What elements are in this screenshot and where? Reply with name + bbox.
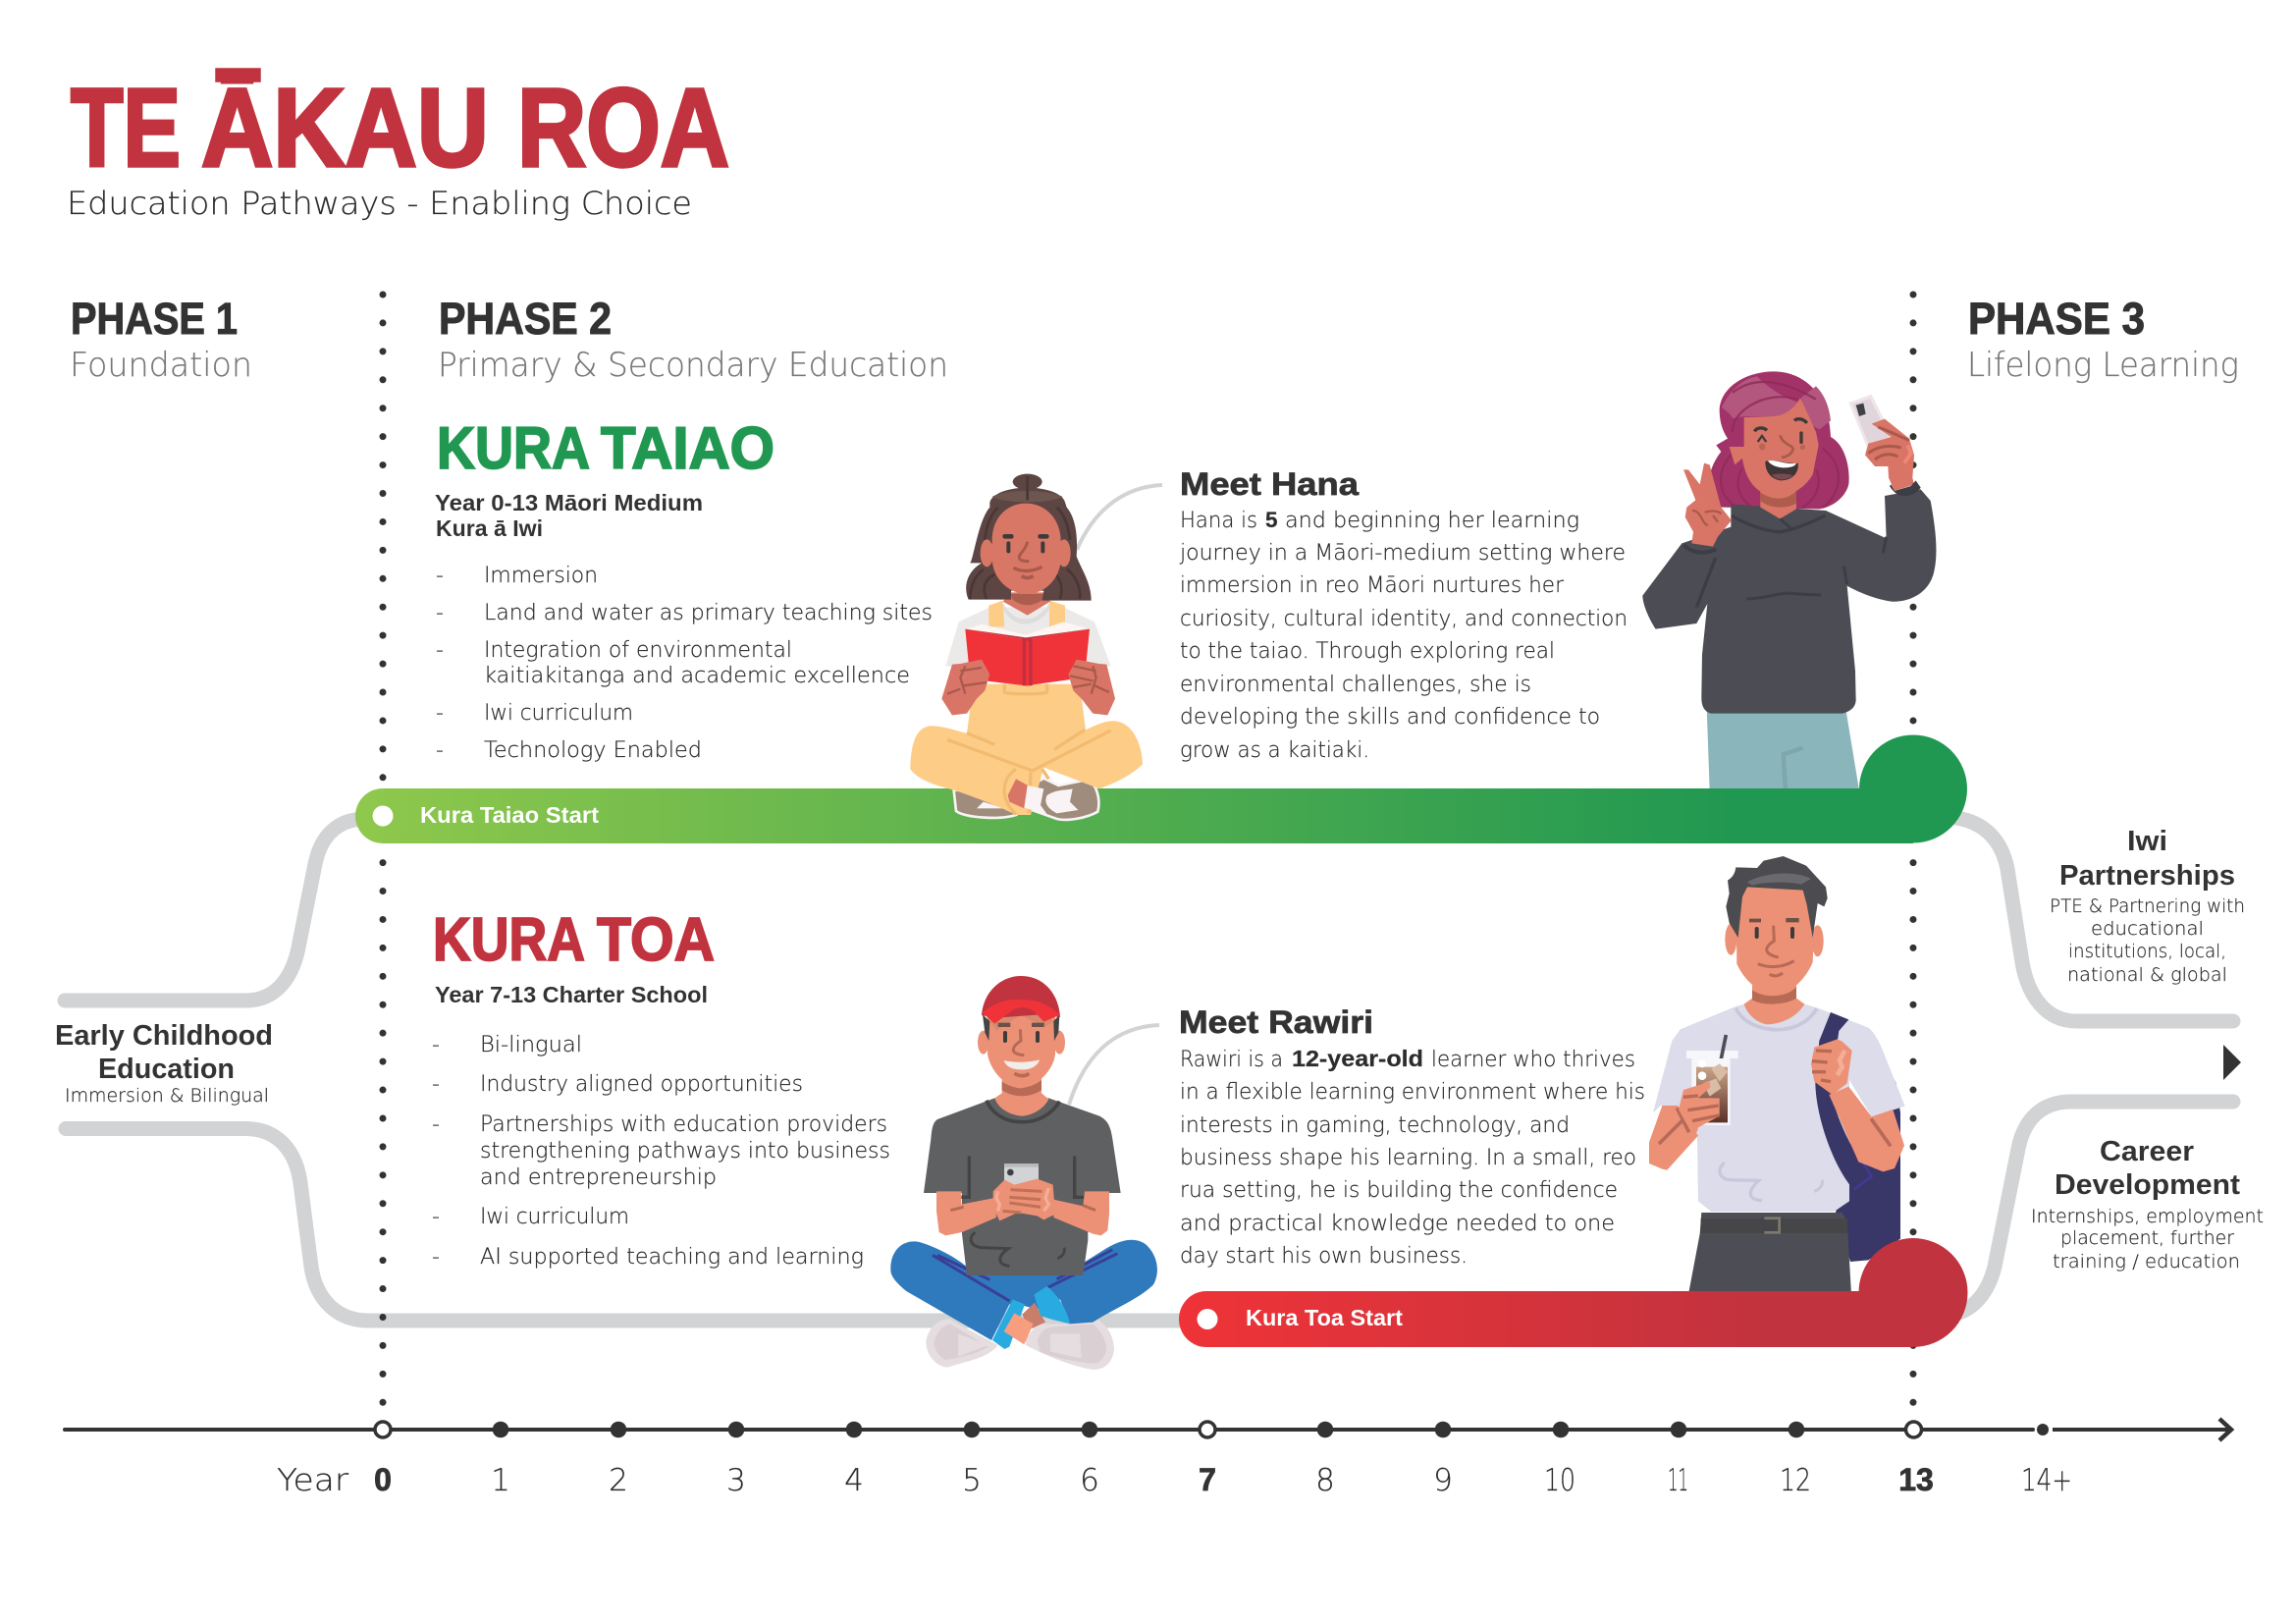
feature list: Land and water as primary teaching sites xyxy=(484,601,933,625)
feature list: Integration of environmental xyxy=(484,638,792,663)
iwi partnerships label: PTE & Partnering with xyxy=(2050,895,2245,917)
feature list: Iwi curriculum xyxy=(480,1205,629,1229)
phase 2 heading: Primary & Secondary Education xyxy=(438,346,948,385)
feature list: and entrepreneurship xyxy=(480,1165,717,1190)
body text: interests in gaming, technology, and xyxy=(1180,1112,1570,1138)
body text: learner who thrives xyxy=(1431,1047,1635,1072)
early childhood label: Early Childhood xyxy=(55,1020,273,1052)
panel: kura toa text xyxy=(432,906,890,1270)
illustration: child rawiri xyxy=(890,976,1157,1370)
early childhood label xyxy=(55,1020,273,1107)
body text: Hana is xyxy=(1180,508,1257,533)
feature list: AI supported teaching and learning xyxy=(480,1245,864,1270)
heading: kura taiao xyxy=(437,415,774,481)
pathway lines: grey connectors xyxy=(65,817,2233,1321)
feature list: - xyxy=(436,601,444,625)
body text: immersion in reo Māori nurtures her xyxy=(1180,572,1565,598)
feature list xyxy=(432,1033,890,1270)
body text: curiosity, cultural identity, and connection xyxy=(1180,606,1628,631)
iwi partnerships label: institutions, local, xyxy=(2068,941,2226,962)
phase 1 heading xyxy=(70,294,252,385)
iwi partnerships label: Iwi xyxy=(2127,826,2167,857)
connector curve xyxy=(1077,485,1162,550)
feature list: kaitiakitanga and academic excellence xyxy=(484,664,910,688)
subheading: Year 7-13 Charter School xyxy=(435,982,708,1007)
feature list: - xyxy=(436,701,444,726)
year labels: 9 xyxy=(1433,1463,1453,1498)
feature list: - xyxy=(432,1033,440,1057)
title: ROA xyxy=(517,66,729,189)
year labels: 4 xyxy=(844,1463,864,1498)
feature list: Industry aligned opportunities xyxy=(480,1072,803,1097)
illustration: teen rawiri xyxy=(1649,856,1905,1294)
year labels: 12 xyxy=(1780,1463,1811,1498)
body text: environmental challenges, she is xyxy=(1180,672,1531,697)
feature list: - xyxy=(436,564,444,588)
career development label: Career xyxy=(2100,1136,2194,1167)
feature list: Partnerships with education providers xyxy=(480,1112,887,1137)
year labels: 1 xyxy=(491,1463,510,1498)
heading: kura toa: KURA xyxy=(433,906,585,974)
heading: kura taiao: KURA xyxy=(437,415,590,481)
title: ĀKAU xyxy=(201,66,489,189)
phase 1 heading: Foundation xyxy=(70,346,252,385)
body text: business shape his learning. In a small, reo xyxy=(1180,1145,1636,1170)
feature list: Iwi curriculum xyxy=(484,701,633,726)
body text xyxy=(1179,508,1628,763)
career development label: Internships, employment xyxy=(2031,1206,2264,1227)
year labels: 3 xyxy=(726,1463,746,1498)
timeline axis: 13 xyxy=(1898,1462,1934,1497)
iwi partnerships label xyxy=(2050,826,2245,986)
callout: meet rawiri xyxy=(1069,1004,1645,1269)
feature list: Bi-lingual xyxy=(480,1033,582,1057)
career development label: training / education xyxy=(2053,1251,2240,1272)
phase 1 heading: PHASE 1 xyxy=(71,294,238,344)
early childhood label: Immersion & Bilingual xyxy=(65,1085,269,1107)
body text: to the taiao. Through exploring real xyxy=(1180,638,1555,664)
year labels: 6 xyxy=(1080,1463,1099,1498)
callout: meet hana: Meet Hana xyxy=(1180,466,1359,502)
body text: rua setting, he is building the confidence xyxy=(1180,1177,1618,1203)
year labels: 10 xyxy=(1544,1463,1575,1498)
timeline axis: 0 xyxy=(374,1462,392,1497)
iwi partnerships label: educational xyxy=(2091,918,2204,940)
illustration: child hana xyxy=(910,474,1143,820)
feature list: - xyxy=(436,638,444,663)
panel: kura taiao text xyxy=(435,415,933,763)
body text: developing the skills and confidence to xyxy=(1180,704,1600,730)
year labels: 2 xyxy=(609,1463,628,1498)
career development label: placement, further xyxy=(2060,1227,2234,1249)
year labels: 8 xyxy=(1315,1463,1335,1498)
phase 3 heading: Lifelong Learning xyxy=(1967,346,2239,385)
early childhood label: Education xyxy=(98,1054,235,1085)
subheading xyxy=(435,490,703,541)
red kura toa start bar xyxy=(1179,1238,1967,1347)
body text: grow as a kaitiaki. xyxy=(1180,737,1369,763)
dotted phase divider: year 13 xyxy=(1910,295,1916,1404)
green kura taiao start bar xyxy=(355,734,1967,843)
feature list: Technology Enabled xyxy=(484,738,702,763)
body text: journey in a Māori-medium setting where xyxy=(1179,540,1626,566)
year labels xyxy=(277,1463,2072,1498)
feature list: Immersion xyxy=(484,564,598,588)
body text: Rawiri is a xyxy=(1180,1047,1283,1072)
callout: meet hana xyxy=(1077,466,1628,763)
year labels: 5 xyxy=(962,1463,982,1498)
feature list: - xyxy=(436,738,444,763)
timeline axis: 7 xyxy=(1199,1462,1216,1497)
year labels: Year xyxy=(277,1463,348,1498)
red kura toa start bar: Kura Toa Start xyxy=(1246,1305,1403,1330)
feature list: - xyxy=(432,1072,440,1097)
subheading: Year 0-13 Māori Medium xyxy=(435,490,703,515)
feature list: - xyxy=(432,1205,440,1229)
year markers xyxy=(493,1422,2049,1437)
heading: kura toa: TOA xyxy=(597,906,715,974)
connector curve xyxy=(1069,1025,1159,1105)
timeline axis xyxy=(65,1419,2231,1498)
feature list: - xyxy=(432,1112,440,1137)
feature list: - xyxy=(432,1245,440,1270)
career development label: Development xyxy=(2055,1169,2240,1201)
heading: kura taiao: TAIAO xyxy=(601,415,774,481)
dotted phase divider: year 0 xyxy=(379,295,387,1404)
bag strap xyxy=(1815,1012,1872,1190)
phase 2 heading: PHASE 2 xyxy=(439,294,612,344)
body text: in a flexible learning environment where his xyxy=(1180,1079,1645,1105)
callout: meet rawiri: Meet Rawiri xyxy=(1179,1004,1373,1040)
phase 2 heading xyxy=(438,294,948,385)
career development label xyxy=(2031,1136,2264,1272)
phase 3 heading xyxy=(1967,294,2239,385)
title: TE xyxy=(71,66,181,189)
iwi partnerships label: Partnerships xyxy=(2059,860,2235,892)
body text: day start his own business. xyxy=(1180,1243,1468,1269)
feature list: strengthening pathways into business xyxy=(480,1139,890,1164)
subtitle: Education Pathways - Enabling Choice xyxy=(67,185,692,222)
title xyxy=(71,66,729,189)
feature list xyxy=(436,564,933,763)
green kura taiao start bar: Kura Taiao Start xyxy=(420,802,599,828)
body text: and practical knowledge needed to one xyxy=(1180,1211,1615,1236)
subheading: Kura ā Iwi xyxy=(436,515,543,541)
icon: arrow triangle xyxy=(2223,1045,2241,1080)
illustration: teen hana xyxy=(1642,371,1936,790)
body text: and beginning her learning xyxy=(1285,508,1579,533)
year labels: 11 xyxy=(1668,1463,1688,1498)
year labels: 14+ xyxy=(2021,1463,2072,1498)
iwi partnerships label: national & global xyxy=(2067,964,2227,986)
body text xyxy=(1180,1046,1645,1269)
phase 3 heading: PHASE 3 xyxy=(1968,294,2145,344)
body text: 12-year-old xyxy=(1292,1046,1423,1071)
body text: 5 xyxy=(1265,508,1278,532)
heading: kura toa xyxy=(433,906,715,974)
